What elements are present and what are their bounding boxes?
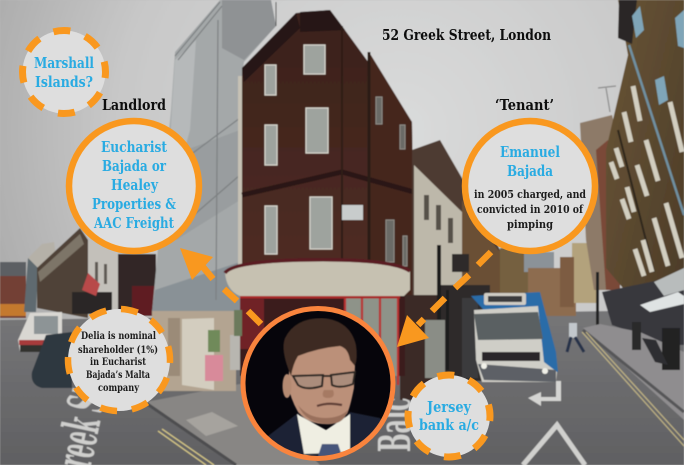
glasses [293,372,355,388]
scaffolded building [152,0,276,312]
nose [323,390,334,398]
circle: tenant: in 2005 charged, and [474,188,586,201]
shop corner with curved fascia [225,260,410,385]
main brick building [242,10,414,300]
circle: Marshall Islands: Islands? [35,73,93,91]
circle: Delia shareholder note: shareholder (1%) [78,344,158,356]
neighbouring buildings [412,140,598,316]
circle: landlord [69,121,199,251]
heading: tenant: ‘Tenant’ [495,96,554,114]
circle: Delia shareholder note: in Eucharist [90,356,146,368]
circle: tenant [465,121,595,251]
arrow: to landlord [180,248,261,324]
circle: Marshall Islands [22,30,106,114]
dark parked car [32,332,72,388]
double yellow lines left [158,429,214,465]
white van [18,312,62,352]
left pavement [146,384,320,465]
window rows [611,86,682,276]
circle: tenant: Bajada [507,162,553,180]
circle: landlord: Properties & [92,195,176,213]
circle: tenant: convicted in 2010 of [477,203,584,216]
circle: Delia shareholder note [68,309,170,411]
painted street name [44,381,421,465]
portrait of man [242,308,396,462]
circle: Delia shareholder note: Delia is nominal [81,330,156,342]
circle: landlord: Eucharist [101,138,167,156]
title: address: 52 Greek Street, London [382,26,551,44]
circle: landlord: Healey [111,176,159,194]
arrow: to tenant's shop [397,252,491,347]
tie [318,444,342,456]
windows [265,45,332,254]
hair [283,318,357,376]
right pavement and kerb [583,324,684,420]
circle: tenant: pimping [507,218,553,231]
blue lorry [471,292,558,382]
road markings: painted arrows [523,381,585,465]
circle: Delia shareholder note: company [98,382,140,394]
circle: Marshall Islands: Marshall [34,54,94,72]
circle: Delia shareholder note: Bajada’s Malta [86,369,150,381]
circle: Jersey bank account: bank a/c [419,416,479,434]
far left buildings [0,228,156,318]
mouth [317,404,342,406]
heading: landlord: Landlord [102,96,166,114]
circle: landlord: AAC Freight [93,214,174,232]
circle: Jersey bank account: Jersey [425,398,472,416]
dark suit [268,412,381,456]
ear [282,374,292,398]
circle: landlord: Bajada or [102,157,167,175]
hoarding [152,311,240,391]
circle: tenant: Emanuel [500,143,560,161]
painted street name: Balc [370,397,421,452]
right shopfronts [596,268,684,345]
road [0,310,684,465]
brick terrace far right [580,115,620,290]
face and neck [288,343,355,424]
shirt [297,414,350,454]
dark shopfronts [400,245,490,400]
circle: Jersey bank account [408,375,490,457]
right brick building [598,0,684,345]
pedestrians [567,322,680,370]
street name sign [342,205,363,220]
